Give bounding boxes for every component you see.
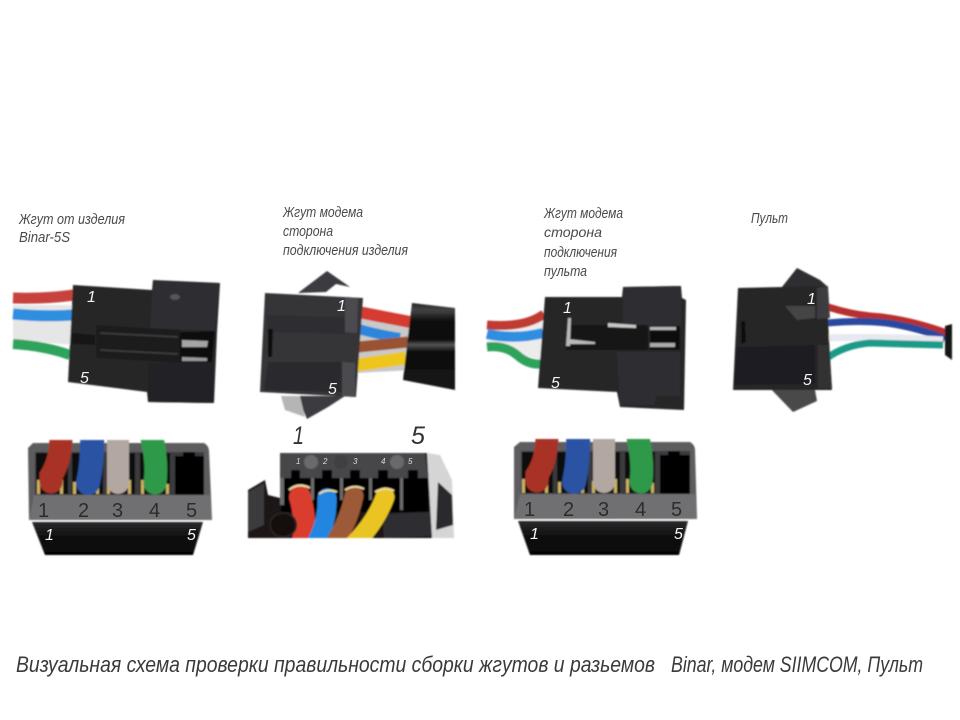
label: modem harness, remote side [543,205,623,280]
embossed cavity numbers: 4 [635,499,646,521]
embossed cavity numbers: 3 [598,499,609,521]
pin numbers [530,526,683,543]
connector end view 3: modem harness terminals [514,429,697,555]
embossed cavity numbers [524,499,682,521]
embossed cavity numbers [38,500,197,522]
connector end view 2: modem harness terminals [246,426,454,540]
pin numbers: 5 [551,375,560,392]
pin numbers: 5 [674,526,683,543]
embossed cavity numbers: 3 [112,500,123,522]
label: modem harness, remote side: подключения [544,244,617,261]
pin numbers: 5 [328,381,337,398]
embossed cavity numbers: 2 [563,499,574,521]
label: modem harness, remote side: сторона [544,225,603,240]
pin numbers: 1 [530,526,539,543]
connector end view 1: Binar harness terminals [28,430,212,555]
connector photo 1: Binar-5S side view [13,280,220,403]
label: modem harness, product side [282,204,408,259]
label: modem harness, remote side: пульта [544,263,587,280]
embossed cavity numbers: 4 [149,500,160,522]
pin numbers [328,298,346,398]
embossed cavity numbers: 5 [671,499,682,521]
embossed cavity numbers: 4 [381,457,386,466]
pin numbers: 1 [87,289,96,306]
pin numbers: 1 [45,527,54,544]
bottom caption: Визуальная схема проверки правильности сборки жгутов и разьемов [16,652,655,677]
pin numbers: 5 [803,372,812,389]
label: modem harness, product side: Жгут модема [282,204,363,221]
label: harness from Binar-5S: Binar-5S [19,229,70,246]
embossed cavity numbers: 2 [78,500,89,522]
pin numbers: 5 [80,370,89,387]
pin numbers: 1 [337,298,346,315]
pin numbers [80,289,96,387]
pin numbers [551,300,572,392]
pin numbers [803,291,816,389]
number 5 above connector: 5 [411,422,425,450]
embossed cavity numbers: 1 [38,500,49,522]
embossed cavity numbers: 5 [186,500,197,522]
connector photo 4: remote [733,268,952,412]
pin numbers [45,527,196,544]
label: modem harness, product side: сторона [283,223,333,240]
pin numbers: 1 [807,291,816,308]
pin numbers: 1 [563,300,572,317]
embossed cavity numbers: 5 [408,457,413,466]
embossed cavity numbers: 3 [353,457,358,466]
label: harness from Binar-5S: Жгут от изделия [18,211,125,228]
infographic canvas [12,206,954,676]
pin numbers: 5 [187,527,196,544]
embossed cavity numbers [296,457,413,466]
connector photo 3: modem harness, remote side [487,286,686,410]
label: remote: Пульт [751,210,788,227]
embossed cavity numbers: 1 [296,457,300,466]
connector photo 2: modem harness, product side [260,271,455,419]
number 1 above connector: 1 [293,422,304,450]
label: modem harness, product side: подключения изделия [283,242,408,259]
embossed cavity numbers: 2 [322,457,328,466]
embossed cavity numbers: 1 [524,499,535,521]
label: harness from Binar-5S [18,211,125,246]
label: modem harness, remote side: Жгут модема [543,205,623,222]
